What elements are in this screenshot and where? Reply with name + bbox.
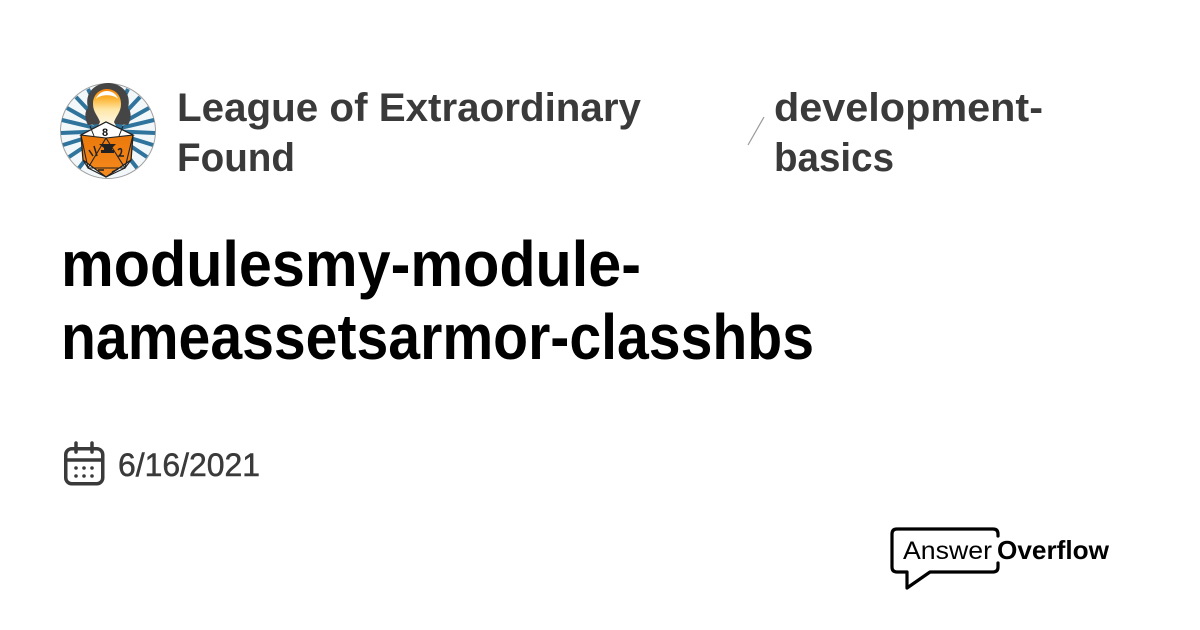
channel name: [774, 86, 1043, 180]
server name: Found: [177, 136, 295, 180]
slash divider: [748, 117, 764, 145]
icon: calendar: [66, 443, 103, 484]
lightbulb glass: [93, 89, 121, 130]
die markings: [89, 146, 124, 172]
logo speech bubble: [892, 529, 998, 588]
title: nameassetsarmor-classhbs: [61, 301, 814, 373]
server name: League of Extraordinary: [177, 86, 642, 130]
icon: server avatar d20 and lightbulb: [60, 83, 156, 178]
logo word Overflow: Overflow: [997, 535, 1110, 565]
lightbulb casing: [85, 83, 131, 125]
server name: [177, 86, 642, 180]
date: 6/16/2021: [118, 447, 260, 483]
logo word Answer: Answer: [903, 537, 992, 565]
logo: AnswerOverflow: [892, 529, 1110, 588]
channel name: development-: [774, 86, 1043, 130]
title: [61, 228, 814, 373]
d20 die: [81, 122, 133, 177]
title: modulesmy-module-: [61, 228, 641, 300]
icon: anvil mark: [99, 144, 116, 153]
die number: 8: [102, 127, 108, 139]
channel name: basics: [774, 136, 894, 180]
